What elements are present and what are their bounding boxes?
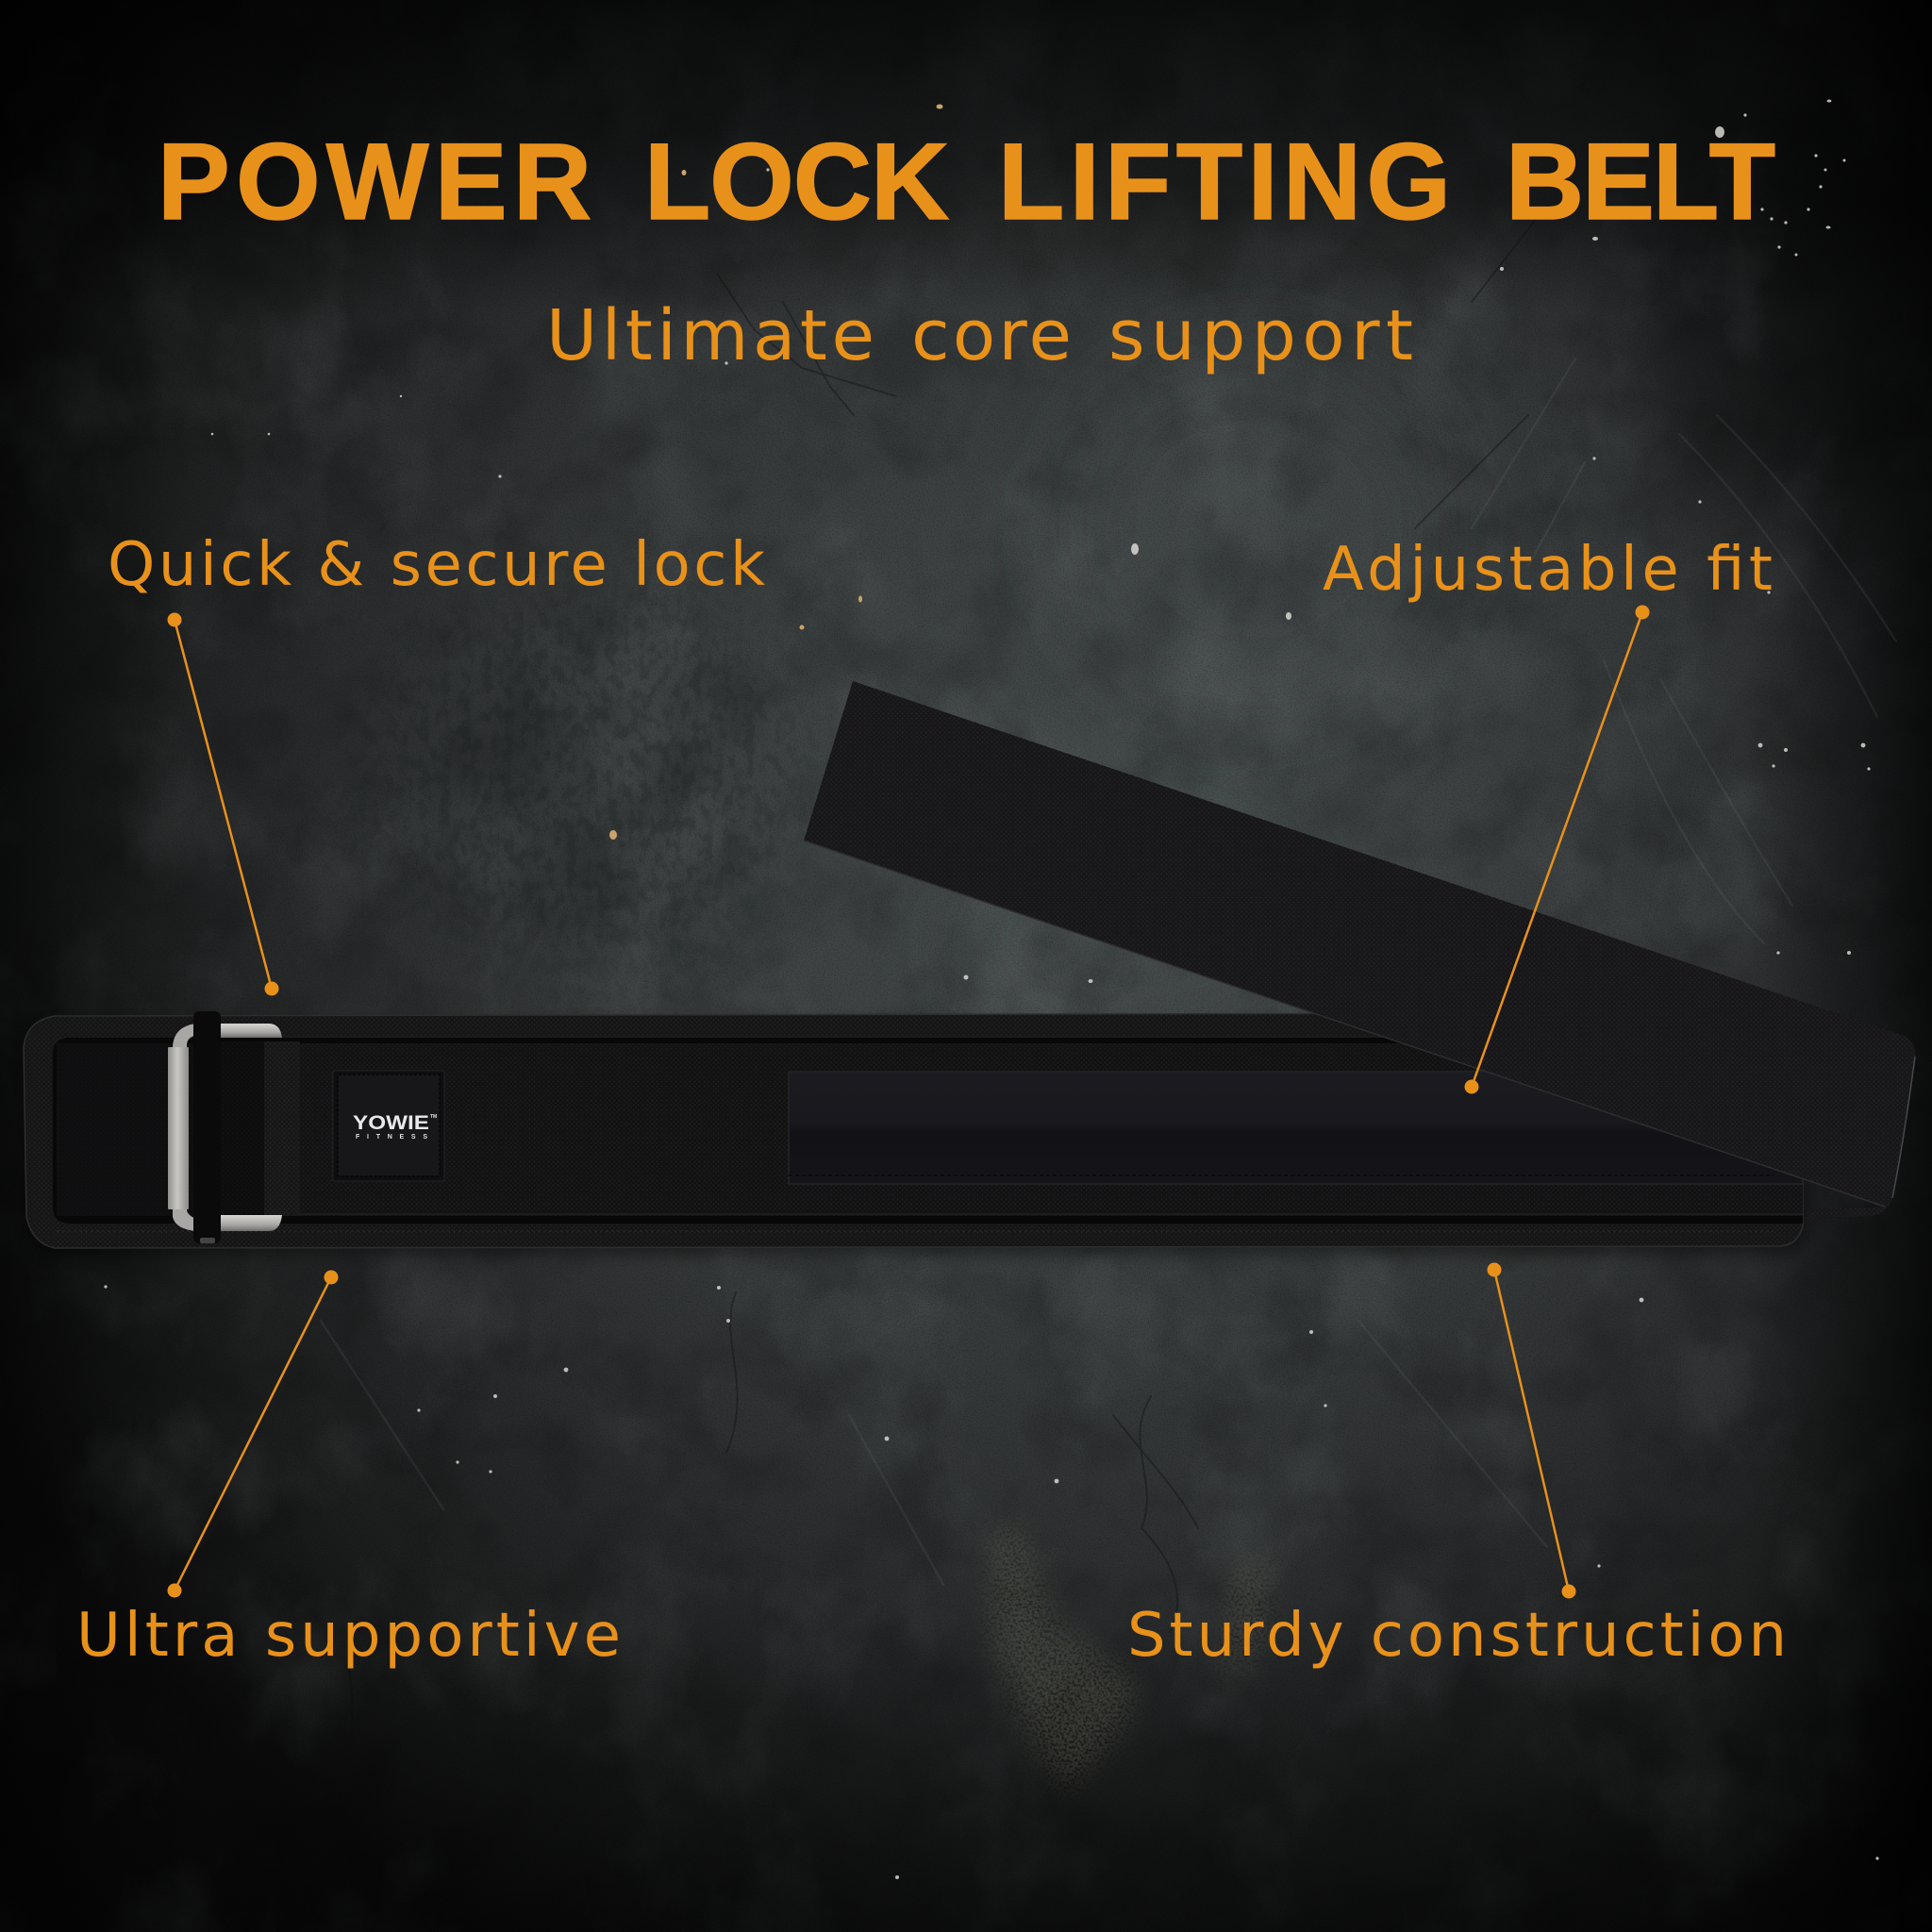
free strap end xyxy=(804,681,1915,1219)
title: POWER xyxy=(158,122,591,242)
title: BELT xyxy=(1506,122,1775,242)
subtitle: core xyxy=(911,295,1072,376)
title: LOCK xyxy=(644,122,949,242)
callout: quick and secure lock xyxy=(108,530,765,996)
velcro patch xyxy=(789,1072,1803,1184)
logo patch: FITNESS xyxy=(356,1134,427,1141)
buckle xyxy=(168,1011,282,1243)
callout: ultra supportive xyxy=(76,1270,621,1671)
webbing over buckle xyxy=(221,1041,300,1216)
callout: quick and secure lock: Quick & secure lock xyxy=(108,530,765,600)
subtitle xyxy=(546,295,1413,376)
belt drop shadow xyxy=(28,1024,1811,1255)
logo patch xyxy=(333,1071,444,1181)
title xyxy=(158,122,1775,242)
callout: adjustable fit: Adjustable fit xyxy=(1323,535,1773,605)
subtitle: support xyxy=(1108,295,1413,376)
keeper loop xyxy=(193,1011,221,1243)
padded centre band xyxy=(57,1043,1803,1216)
callout: sturdy construction: Sturdy construction xyxy=(1127,1601,1787,1671)
belt body xyxy=(24,1013,1803,1248)
logo patch: TM xyxy=(430,1114,437,1120)
callout: ultra supportive: Ultra supportive xyxy=(76,1601,621,1671)
title: LIFTING xyxy=(998,122,1451,242)
subtitle: Ultimate xyxy=(546,295,874,376)
product: lifting belt xyxy=(24,681,1915,1248)
callout: adjustable fit xyxy=(1323,535,1773,1094)
callout: sturdy construction xyxy=(1127,1262,1787,1671)
logo patch: YOWIE xyxy=(353,1112,429,1134)
recessed inner panel xyxy=(53,1036,1803,1224)
